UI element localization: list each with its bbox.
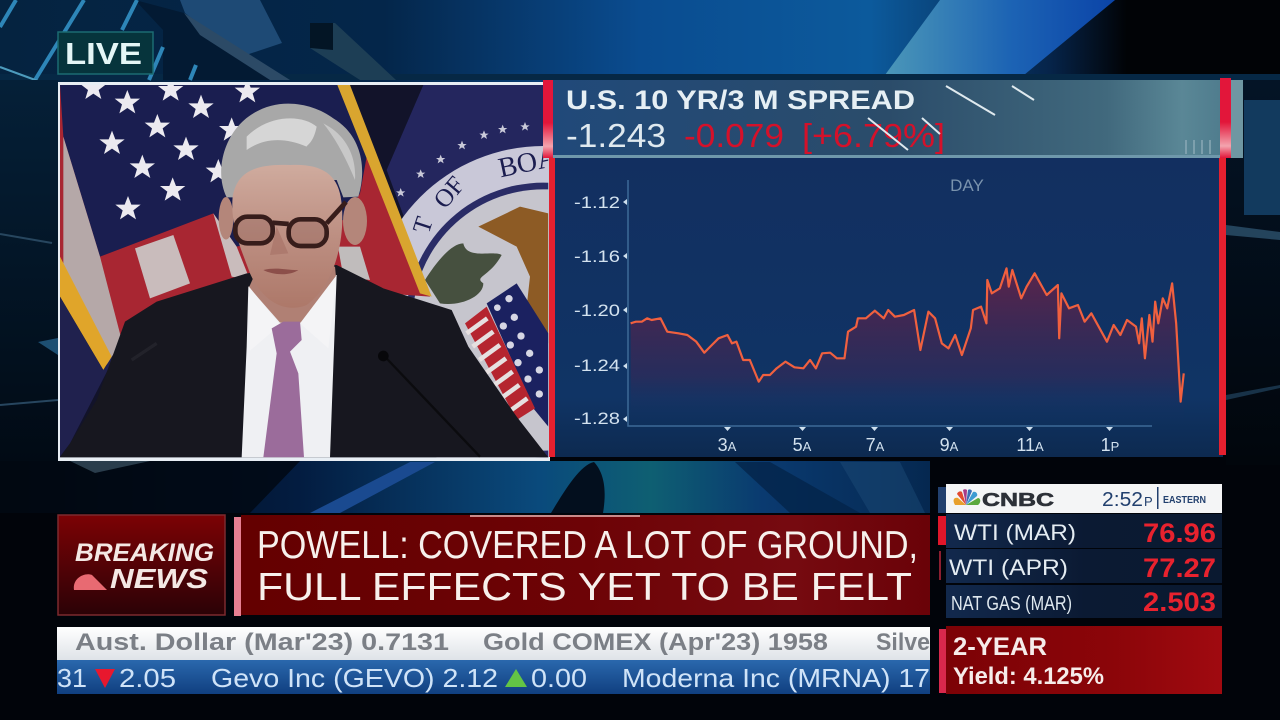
- ticker bottom row: 2.05: [119, 663, 176, 693]
- market row: natural gas: NAT GAS (MAR): [951, 593, 1072, 615]
- cnbc clock bar: EASTERN: [1163, 495, 1206, 506]
- ears: [219, 197, 367, 245]
- live badge: [58, 32, 153, 74]
- cnbc clock bar: CNBC: [982, 490, 1054, 510]
- header values: -1.243: [566, 117, 666, 154]
- market row: WTI March: WTI (MAR): [954, 520, 1076, 545]
- video panel: Powell at press conference: [58, 82, 550, 461]
- chart panel: [549, 157, 1226, 457]
- mouth and nose: [263, 227, 298, 274]
- y axis labels: -1.20: [574, 301, 620, 320]
- headline banner: FULL EFFECTS YET TO BE FELT: [257, 566, 912, 609]
- ticker top row: Silve: [876, 629, 930, 656]
- live badge: LIVE: [65, 36, 142, 71]
- tie: [263, 322, 304, 457]
- cnbc clock bar: P: [1144, 494, 1153, 509]
- market row: natural gas: 2.503: [1143, 587, 1216, 617]
- breaking news badge: NEWS: [110, 563, 208, 594]
- two-year yield panel: Yield: 4.125%: [953, 663, 1104, 690]
- y axis labels: [574, 193, 620, 428]
- ticker bottom row: Gevo Inc (GEVO) 2.12: [211, 663, 498, 693]
- icon: peacock logo: [954, 489, 980, 505]
- american flag: [60, 76, 432, 457]
- ticker bottom row: 31: [57, 663, 87, 693]
- market row: WTI March: 76.96: [1143, 518, 1216, 548]
- x axis labels: 5A: [793, 435, 812, 455]
- face: [232, 165, 342, 308]
- x axis labels: 7A: [866, 435, 885, 455]
- cnbc clock bar: 2:52: [1102, 489, 1143, 511]
- collar: [249, 275, 337, 323]
- fed seal: BOA: [496, 142, 560, 184]
- x axis labels: 11A: [1016, 435, 1044, 455]
- fed seal: T: [407, 213, 439, 237]
- microphones: [383, 355, 480, 457]
- shirt: [242, 275, 337, 457]
- spread line chart: [631, 268, 1184, 423]
- ticker top row: Aust. Dollar (Mar'23) 0.7131: [75, 629, 449, 656]
- x axis labels: 9A: [940, 435, 959, 455]
- market row: WTI April: [939, 549, 1222, 583]
- two-year yield panel: [939, 626, 1222, 694]
- fed seal: [369, 85, 717, 494]
- market row: natural gas: [946, 585, 1222, 618]
- header values: [+6.79%]: [802, 117, 945, 154]
- suit: [60, 265, 548, 457]
- y axis labels: -1.28: [574, 409, 620, 428]
- header values: -0.079: [684, 117, 784, 154]
- glasses: [235, 202, 346, 246]
- chart axes: [623, 180, 1152, 431]
- x axis labels: 3A: [718, 435, 737, 455]
- breaking news badge: [58, 515, 225, 615]
- ticker top row: Gold COMEX (Apr'23) 1958: [483, 629, 828, 656]
- x axis labels: [718, 435, 1119, 455]
- day label: DAY: [950, 176, 984, 195]
- neck: [249, 267, 336, 323]
- cnbc clock bar: [938, 484, 1222, 513]
- market row: WTI April: WTI (APR): [949, 555, 1068, 580]
- market row: WTI April: 77.27: [1143, 553, 1216, 583]
- ticker top row: [57, 627, 930, 660]
- x axis labels: 1P: [1101, 435, 1119, 455]
- y axis labels: -1.12: [574, 193, 620, 212]
- fed seal: OF: [428, 171, 470, 214]
- two-year yield panel: 2-YEAR: [953, 633, 1047, 661]
- hair: [221, 104, 362, 197]
- chart header: [543, 78, 1243, 158]
- ticker bottom row: [57, 660, 930, 694]
- ticker bottom row: Moderna Inc (MRNA) 17: [622, 663, 930, 693]
- headline banner: POWELL: COVERED A LOT OF GROUND,: [257, 524, 918, 567]
- ticker bottom row: 0.00: [531, 663, 587, 693]
- header title: U.S. 10 YR/3 M SPREAD: [566, 85, 915, 115]
- header values: [566, 117, 945, 154]
- y axis labels: -1.24: [574, 356, 620, 375]
- market row: WTI March: [938, 514, 1222, 548]
- breaking news badge: BREAKING: [75, 539, 214, 567]
- y axis labels: -1.16: [574, 247, 620, 266]
- headline banner: [234, 515, 930, 616]
